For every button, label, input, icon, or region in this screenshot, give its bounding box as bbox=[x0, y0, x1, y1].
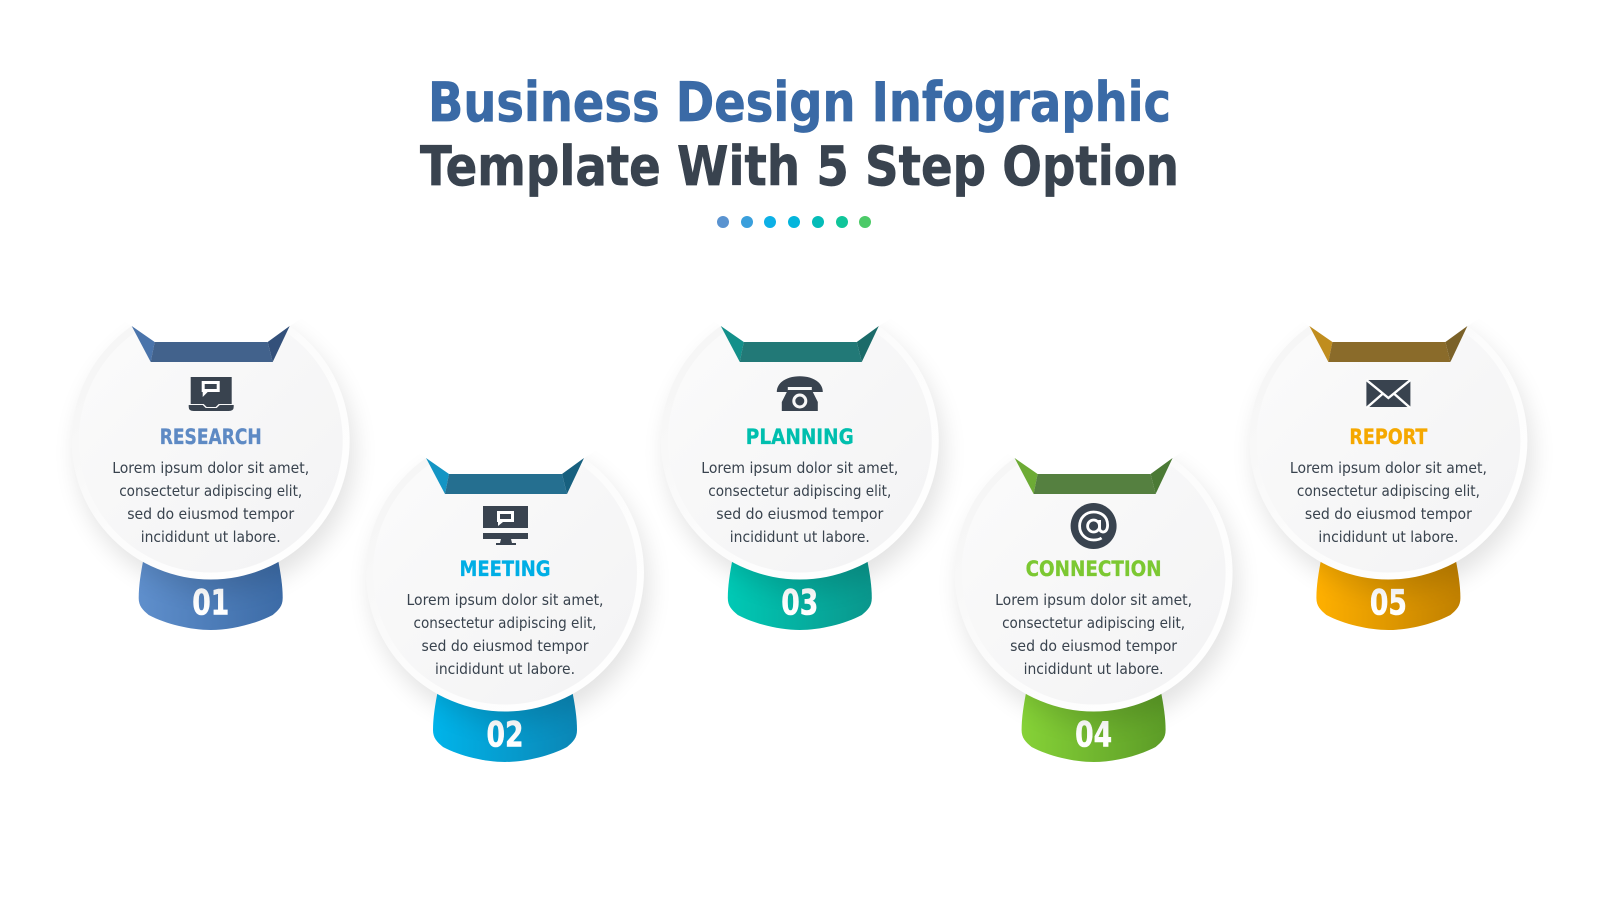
top notch bbox=[111, 268, 311, 342]
body text: sed do eiusmod tempor bbox=[716, 505, 884, 523]
disc shadow bbox=[1254, 314, 1532, 592]
body text: sed do eiusmod tempor bbox=[422, 637, 589, 655]
body text: incididunt ut labore. bbox=[730, 528, 870, 546]
step 04: connection bbox=[955, 400, 1238, 762]
ribbon 05 bbox=[1309, 326, 1467, 362]
ribbon 01 bbox=[132, 326, 290, 362]
number tab 03 bbox=[728, 558, 872, 630]
disc shadow bbox=[960, 446, 1238, 724]
decorative dot row bbox=[717, 216, 871, 228]
ribbon 02 bbox=[426, 458, 584, 494]
disc bbox=[366, 434, 644, 712]
body text: consectetur adipiscing elit, bbox=[1002, 614, 1185, 632]
body text: Lorem ipsum dolor sit amet, bbox=[995, 591, 1192, 609]
body text: consectetur adipiscing elit, bbox=[119, 482, 302, 500]
disc bbox=[661, 302, 939, 580]
step 02: meeting bbox=[366, 400, 649, 762]
body text bbox=[406, 591, 604, 678]
body text: incididunt ut labore. bbox=[141, 528, 281, 546]
number tab 01 bbox=[139, 558, 283, 630]
icon: laptop with speech bubble bbox=[189, 377, 234, 411]
body text: consectetur adipiscing elit, bbox=[708, 482, 891, 500]
label: meeting: MEETING bbox=[460, 557, 550, 581]
top notch bbox=[405, 400, 605, 474]
number 05: 05 bbox=[1370, 584, 1407, 624]
body text: incididunt ut labore. bbox=[435, 660, 575, 678]
number 01: 01 bbox=[192, 584, 229, 624]
body text: Lorem ipsum dolor sit amet, bbox=[701, 459, 898, 477]
body text bbox=[1290, 459, 1487, 546]
label: planning: PLANNING bbox=[746, 425, 854, 449]
number tab 02 bbox=[433, 690, 577, 762]
step 05: report bbox=[1249, 268, 1532, 630]
body text: consectetur adipiscing elit, bbox=[1297, 482, 1480, 500]
disc bbox=[1249, 302, 1527, 580]
body text: consectetur adipiscing elit, bbox=[414, 614, 596, 632]
icon: desktop monitor with speech bubble bbox=[483, 506, 528, 545]
body text: incididunt ut labore. bbox=[1318, 528, 1458, 546]
body text: Lorem ipsum dolor sit amet, bbox=[1290, 459, 1487, 477]
label: report: REPORT bbox=[1349, 425, 1428, 449]
icon: envelope bbox=[1366, 380, 1410, 408]
body text bbox=[995, 591, 1192, 678]
step 01: research bbox=[72, 268, 355, 630]
body text: Lorem ipsum dolor sit amet, bbox=[112, 459, 309, 477]
ribbon 04 bbox=[1015, 458, 1173, 494]
icon: telephone bbox=[777, 376, 823, 411]
disc shadow bbox=[77, 314, 355, 592]
label: research: RESEARCH bbox=[160, 425, 262, 449]
number tab 05 bbox=[1316, 558, 1460, 630]
number tab 04 bbox=[1022, 690, 1166, 762]
title bbox=[420, 71, 1179, 198]
icon: at sign bbox=[1071, 503, 1117, 549]
title: Business Design Infographic bbox=[428, 71, 1171, 134]
body text: sed do eiusmod tempor bbox=[1010, 637, 1178, 655]
label: connection: CONNECTION bbox=[1026, 557, 1162, 581]
disc bbox=[72, 302, 350, 580]
body text: incididunt ut labore. bbox=[1024, 660, 1164, 678]
body text: Lorem ipsum dolor sit amet, bbox=[406, 591, 604, 609]
body text: sed do eiusmod tempor bbox=[127, 505, 295, 523]
disc shadow bbox=[371, 446, 649, 724]
step 03: planning bbox=[661, 268, 944, 630]
body text bbox=[112, 459, 309, 546]
top notch bbox=[1288, 268, 1488, 342]
top notch bbox=[994, 400, 1194, 474]
body text: sed do eiusmod tempor bbox=[1305, 505, 1473, 523]
disc bbox=[955, 434, 1233, 712]
body text bbox=[701, 459, 898, 546]
number 04: 04 bbox=[1075, 716, 1112, 756]
title: Template With 5 Step Option bbox=[420, 135, 1179, 198]
number 02: 02 bbox=[486, 716, 524, 756]
number 03: 03 bbox=[781, 584, 818, 624]
ribbon 03 bbox=[721, 326, 879, 362]
top notch bbox=[700, 268, 900, 342]
disc shadow bbox=[666, 314, 944, 592]
